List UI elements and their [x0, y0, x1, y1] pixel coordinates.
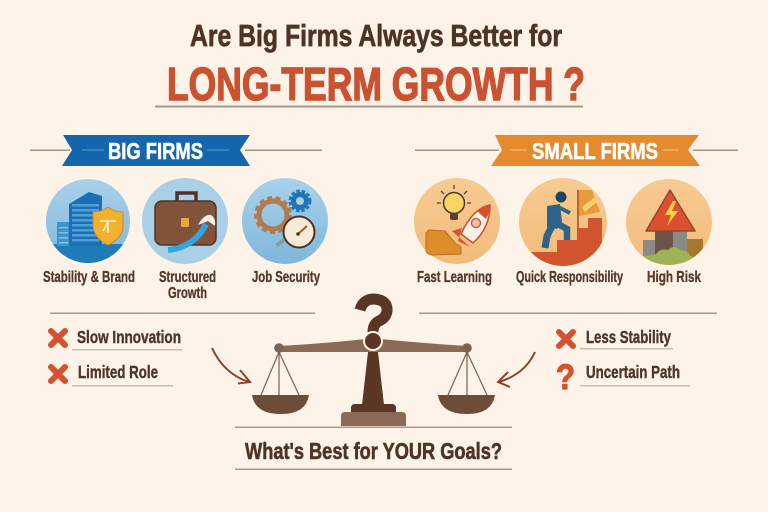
label: fast learning: Fast Learning: [417, 269, 492, 286]
title line two: LONG-TERM GROWTH ?: [167, 58, 585, 110]
icon: cross: [559, 332, 573, 346]
label: stability and brand: Stability & Brand: [43, 269, 135, 286]
question mark: [360, 299, 387, 332]
label: structured growth: Growth: [168, 285, 207, 302]
arrow: right pointing to scale: [498, 352, 535, 387]
icon: buildings and shield: [46, 179, 130, 263]
label: quick responsibility: Quick Responsibility: [516, 269, 623, 286]
text: slow innovation: Slow Innovation: [77, 327, 181, 347]
big firms ribbon: [30, 135, 322, 166]
list: big firms downsides: [51, 327, 182, 386]
icon: question mark: ?: [556, 358, 575, 397]
small firms ribbon: SMALL FIRMS: [532, 138, 658, 164]
big firms ribbon: BIG FIRMS: [108, 138, 203, 164]
label: job security: Job Security: [252, 269, 320, 286]
icon: bulb and rocket: [414, 178, 500, 264]
icon: briefcase with arrow: [142, 178, 228, 264]
strings: [261, 352, 487, 395]
text: limited role: Limited Role: [78, 362, 158, 382]
panel: small firms: [414, 135, 738, 286]
icon: climbing stairs: [519, 178, 607, 270]
pivot: [364, 332, 382, 350]
icon: gears and clock: [242, 178, 328, 264]
list: small firms downsides: [556, 327, 690, 397]
title underline: [155, 106, 583, 108]
left pan: [252, 395, 309, 414]
label: structured growth: [159, 269, 216, 302]
icon: high risk warning: [626, 179, 712, 270]
label: structured growth: Structured: [159, 269, 216, 286]
icon: cross: [51, 331, 65, 345]
balance scale: [252, 299, 495, 426]
text: less stability: Less Stability: [586, 327, 671, 347]
label: high risk: High Risk: [647, 269, 701, 286]
right divider: [419, 312, 717, 314]
panel: big firms: [30, 135, 328, 302]
arrow: left pointing to scale: [212, 348, 250, 384]
base: [351, 404, 396, 412]
small firms ribbon: [415, 135, 738, 166]
left divider: [50, 312, 315, 314]
right pan: [438, 395, 495, 414]
text: uncertain path: Uncertain Path: [586, 362, 680, 382]
title: [155, 18, 585, 110]
title line one: Are Big Firms Always Better for: [190, 18, 562, 53]
closing question: What's Best for YOUR Goals?: [245, 438, 502, 464]
beam: [279, 339, 467, 352]
icon: cross: [51, 367, 65, 381]
column: [362, 352, 384, 405]
